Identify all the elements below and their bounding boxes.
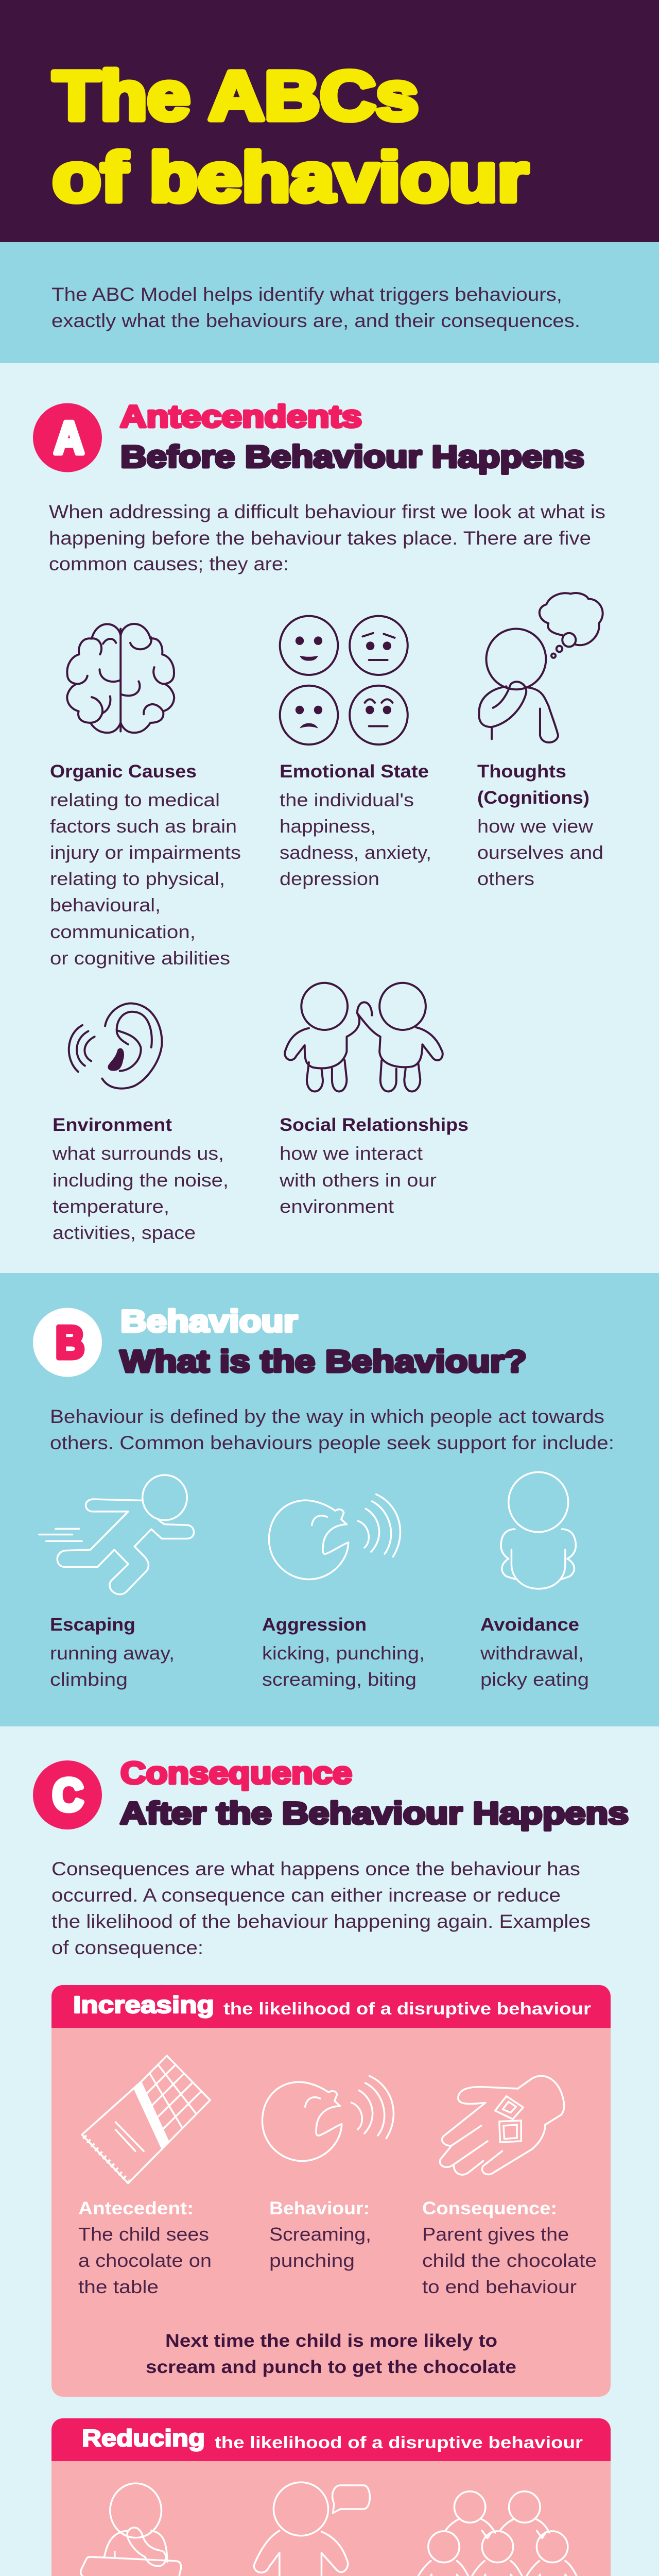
panel: C consequence	[0, 1726, 659, 2576]
paragraph B: Behaviour is defined by the way in which people act towards	[50, 1406, 604, 1427]
increasing antecedent text: the table	[78, 2276, 159, 2297]
icon: bored child at desk	[81, 2483, 181, 2576]
panel: reducing example	[51, 2418, 611, 2576]
heading B	[120, 1304, 527, 1379]
heading C	[120, 1756, 629, 1831]
increasing antecedent text: The child sees	[78, 2224, 209, 2245]
emotional state text: Emotional State	[280, 761, 429, 782]
icon: shouting head	[269, 1494, 400, 1579]
environment text: temperature,	[53, 1196, 169, 1217]
panel: increasing example	[51, 1985, 611, 2397]
organic causes text: injury or impairments	[50, 842, 241, 863]
organic causes text: communication,	[50, 921, 196, 942]
panel: introduction	[0, 242, 659, 363]
environment text: including the noise,	[53, 1170, 229, 1191]
badge A: A	[54, 412, 84, 463]
paragraph C: occurred. A consequence can either increase or reduce	[51, 1885, 561, 1906]
reducing header text: the likelihood of a disruptive behaviour	[215, 2433, 583, 2452]
thoughts text	[477, 761, 603, 889]
social relationships text: with others in our	[279, 1170, 437, 1191]
reducing header text	[82, 2425, 583, 2452]
title	[53, 58, 528, 216]
paragraph C: of consequence:	[51, 1937, 203, 1958]
increasing conclusion: Next time the child is more likely to	[165, 2331, 497, 2351]
heading B: What is the Behaviour?	[120, 1344, 527, 1379]
increasing header text: the likelihood of a disruptive behaviour	[223, 1999, 591, 2018]
intro text: exactly what the behaviours are, and their consequences.	[51, 310, 580, 331]
icon: group of students	[417, 2492, 579, 2576]
heading A: Before Behaviour Happens	[120, 439, 584, 474]
social relationships text: how we interact	[280, 1143, 423, 1164]
escaping text	[50, 1615, 175, 1690]
environment text: Environment	[53, 1115, 172, 1135]
social relationships text	[279, 1115, 469, 1217]
increasing antecedent text	[78, 2198, 212, 2297]
intro text	[51, 284, 580, 331]
title: The ABCs	[53, 58, 419, 134]
avoidance text: Avoidance	[480, 1615, 579, 1635]
emotional state text: depression	[280, 868, 379, 889]
emotional state text: the individual's	[280, 789, 414, 810]
icon: hand holding chocolate	[440, 2076, 564, 2175]
emotional state text: sadness, anxiety,	[280, 842, 431, 863]
paragraph B: others. Common behaviours people seek support for include:	[50, 1432, 614, 1453]
avoidance text	[480, 1615, 589, 1690]
badge B: B	[56, 1317, 84, 1368]
paragraph C: Consequences are what happens once the behaviour has	[51, 1858, 580, 1879]
increasing behaviour text: Behaviour:	[269, 2198, 370, 2218]
increasing consequence text: Consequence:	[422, 2198, 557, 2218]
panel: title banner	[0, 0, 659, 242]
organic causes text: relating to physical,	[50, 868, 225, 889]
aggression text: screaming, biting	[262, 1669, 417, 1690]
heading A: Antecendents	[120, 399, 362, 434]
icon: chocolate bar	[82, 2056, 210, 2183]
icon: ear	[69, 1004, 162, 1089]
paragraph C: the likelihood of the behaviour happening again. Examples	[51, 1911, 591, 1932]
paragraph A: happening before the behaviour takes place. There are five	[49, 528, 591, 549]
icon: two children holding hands	[285, 983, 443, 1092]
avoidance text: picky eating	[480, 1669, 589, 1690]
icon: four emotion faces	[280, 616, 408, 744]
paragraph A: common causes; they are:	[49, 553, 289, 574]
thoughts text: Thoughts	[477, 761, 566, 782]
heading A	[120, 399, 584, 474]
icon: person from behind	[501, 1472, 576, 1589]
increasing consequence text: to end behaviour	[422, 2276, 577, 2297]
increasing antecedent text: a chocolate on	[78, 2250, 212, 2271]
increasing behaviour text: punching	[269, 2250, 355, 2271]
icon: person speaking	[254, 2482, 370, 2576]
thoughts text: ourselves and	[477, 842, 603, 863]
reducing header text: Reducing	[82, 2425, 205, 2451]
increasing behaviour text	[269, 2198, 371, 2271]
icon: shouting head	[262, 2076, 393, 2161]
environment text	[52, 1115, 229, 1243]
aggression text: Aggression	[262, 1615, 367, 1635]
emotional state text: happiness,	[280, 816, 376, 837]
increasing consequence text: child the chocolate	[422, 2250, 597, 2271]
escaping text: climbing	[50, 1669, 128, 1690]
thoughts text: how we view	[477, 816, 594, 837]
increasing behaviour text: Screaming,	[269, 2224, 371, 2245]
aggression text: kicking, punching,	[262, 1642, 425, 1664]
organic causes text: Organic Causes	[50, 761, 197, 782]
increasing consequence text	[422, 2198, 597, 2297]
badge B	[33, 1308, 102, 1377]
panel: B behaviour	[0, 1273, 659, 1726]
heading B: Behaviour	[120, 1304, 298, 1338]
paragraph C	[51, 1858, 591, 1958]
organic causes text	[50, 761, 241, 969]
escaping text: running away,	[50, 1642, 175, 1664]
organic causes text: relating to medical	[50, 789, 220, 810]
social relationships text: Social Relationships	[280, 1115, 469, 1135]
increasing antecedent text: Antecedent:	[78, 2198, 194, 2218]
environment text: activities, space	[53, 1222, 196, 1243]
thoughts text: (Cognitions)	[477, 788, 589, 808]
paragraph A	[49, 501, 605, 574]
aggression text	[262, 1615, 425, 1690]
organic causes text: behavioural,	[50, 894, 161, 916]
organic causes text: or cognitive abilities	[50, 947, 230, 969]
social relationships text: environment	[280, 1196, 394, 1217]
heading C: After the Behaviour Happens	[120, 1796, 629, 1831]
escaping text: Escaping	[50, 1615, 135, 1635]
environment text: what surrounds us,	[52, 1143, 224, 1164]
paragraph A: When addressing a difficult behaviour first we look at what is	[49, 501, 605, 522]
increasing conclusion	[146, 2331, 516, 2377]
intro text: The ABC Model helps identify what triggers behaviours,	[51, 284, 562, 305]
thoughts text: others	[477, 868, 534, 889]
emotional state text	[280, 761, 431, 889]
increasing header text: Increasing	[73, 1991, 214, 2018]
panel: A antecedents	[0, 363, 659, 1273]
increasing consequence text: Parent gives the	[422, 2224, 569, 2245]
organic causes text: factors such as brain	[50, 816, 237, 837]
icon: thinking person	[479, 593, 603, 742]
badge A	[33, 403, 102, 472]
icon: running person	[39, 1475, 194, 1595]
icon: brain	[67, 624, 174, 733]
badge C: C	[53, 1769, 83, 1820]
paragraph B	[50, 1406, 614, 1453]
badge C	[33, 1760, 102, 1829]
heading C: Consequence	[120, 1756, 352, 1790]
increasing conclusion: scream and punch to get the chocolate	[146, 2357, 516, 2377]
avoidance text: withdrawal,	[480, 1642, 584, 1664]
increasing header text	[73, 1991, 591, 2018]
title: of behaviour	[53, 139, 528, 216]
